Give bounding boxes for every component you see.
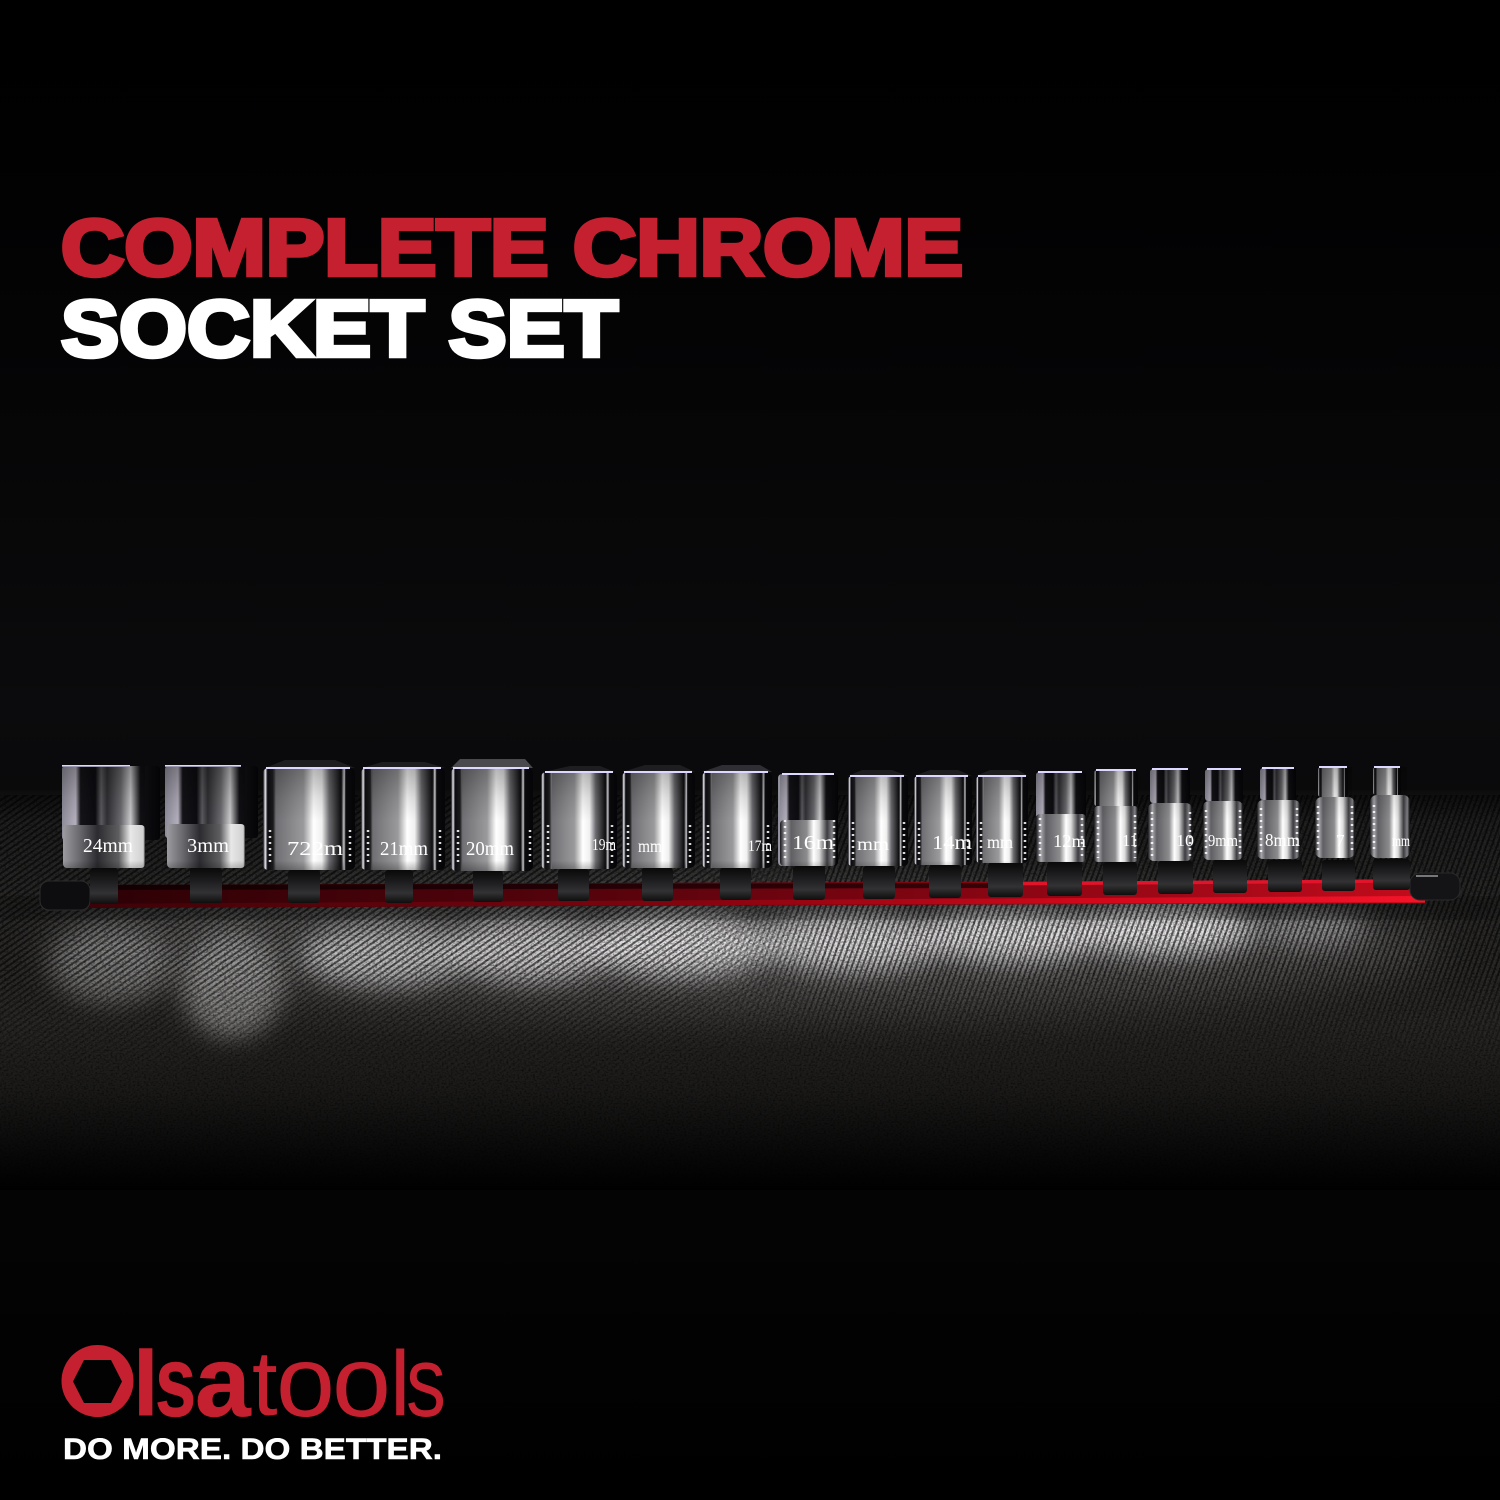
light reflection pools xyxy=(50,906,1370,1037)
rail body xyxy=(70,880,1425,908)
wordmark bold part: s xyxy=(155,1325,196,1438)
socket 13mm: mm xyxy=(987,832,1013,852)
title xyxy=(61,203,963,373)
clips xyxy=(90,859,1410,904)
socket 12mm xyxy=(1036,772,1086,862)
wordmark bold part: a xyxy=(195,1326,252,1438)
socket 6mm xyxy=(1370,767,1410,858)
socket 21mm xyxy=(361,762,445,870)
right end cap xyxy=(1410,873,1460,900)
wordmark light part: l xyxy=(390,1333,410,1435)
socket 22mm xyxy=(263,760,355,870)
socket 9mm xyxy=(1203,769,1243,860)
socket 22mm: 722m xyxy=(287,838,344,860)
socket 20mm xyxy=(451,759,533,871)
tagline: DO MORE. DO BETTER. xyxy=(63,1433,442,1466)
socket 18mm: mm xyxy=(638,836,662,856)
shadow beneath rail xyxy=(0,902,1500,914)
wordmark light part: o xyxy=(332,1326,391,1437)
wordmark light part xyxy=(252,1326,446,1438)
socket 14mm: 14m xyxy=(932,832,972,854)
socket rail xyxy=(40,859,1460,910)
socket 19mm xyxy=(541,766,617,869)
socket 7mm xyxy=(1315,767,1355,858)
title line 1: COMPLETE CHROME xyxy=(61,203,963,292)
socket 10mm: 10 xyxy=(1176,831,1194,850)
socket 20mm: 20mm xyxy=(466,838,514,860)
socket 24mm: 24mm xyxy=(83,835,133,857)
socket 6mm: mm xyxy=(1392,833,1410,850)
weave texture xyxy=(0,795,1500,1048)
socket 10mm xyxy=(1148,769,1194,861)
socket 16mm xyxy=(778,774,838,866)
title line 2: SOCKET SET xyxy=(61,284,618,373)
table surface xyxy=(0,800,1500,1135)
wordmark bold part: l xyxy=(133,1333,159,1435)
socket 23mm: 3mm xyxy=(187,835,229,857)
wordmark light part: o xyxy=(276,1326,335,1437)
rail highlight line xyxy=(70,896,1425,908)
socket 8mm: 8mm xyxy=(1265,830,1300,850)
socket 21mm: 21mm xyxy=(380,838,428,860)
socket 11mm: 11 xyxy=(1122,831,1138,850)
left end cap xyxy=(40,881,90,910)
wordmark light part: s xyxy=(406,1327,446,1438)
socket 18mm xyxy=(622,765,695,868)
wordmark light part: t xyxy=(252,1333,278,1435)
socket 14mm xyxy=(914,770,972,865)
socket 17mm: 17m xyxy=(748,838,772,855)
socket 15mm xyxy=(848,770,908,866)
socket 9mm: 9mm xyxy=(1208,831,1238,850)
socket 13mm xyxy=(976,770,1028,863)
socket 23mm xyxy=(165,765,258,868)
socket 12mm: 12m xyxy=(1053,831,1086,851)
socket 8mm xyxy=(1257,768,1300,859)
socket 19mm: 19m xyxy=(592,835,616,854)
sockets row xyxy=(62,759,1410,871)
broad light band xyxy=(40,885,1440,1005)
socket 15mm: mm xyxy=(857,834,889,854)
logo xyxy=(62,1325,446,1466)
icon: hexagon ring O xyxy=(62,1345,134,1417)
socket 7mm: 7 xyxy=(1336,831,1345,850)
socket 17mm xyxy=(702,765,772,868)
rail top line xyxy=(1000,879,1425,886)
socket 16mm: 16m xyxy=(792,832,835,854)
socket 24mm xyxy=(62,765,160,868)
socket 11mm xyxy=(1094,770,1138,862)
wordmark bold part xyxy=(133,1325,252,1438)
